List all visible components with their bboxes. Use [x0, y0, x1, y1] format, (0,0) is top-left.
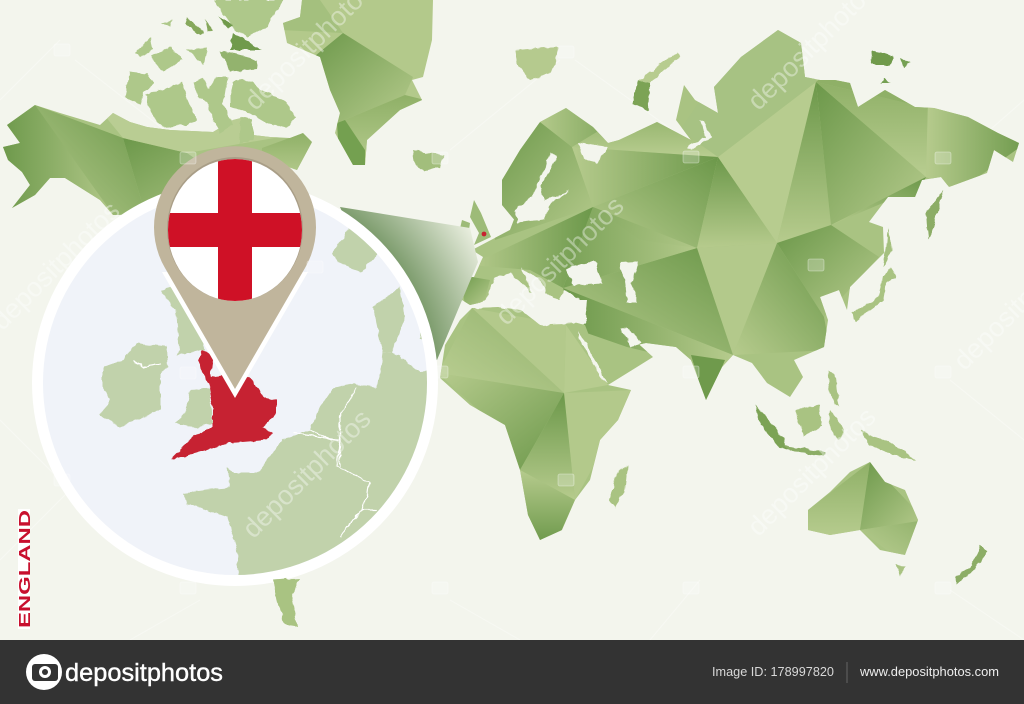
detail map: continental Europe	[99, 228, 427, 575]
vertical country label: ENGLAND	[17, 510, 34, 628]
magnifier circle	[32, 180, 445, 600]
logo wordmark: depositphotos	[65, 659, 223, 687]
map: Greenland	[283, 0, 433, 165]
vertical country label	[17, 509, 34, 629]
island below circle	[273, 578, 300, 627]
map: Iceland	[412, 150, 445, 171]
map: Arctic and Pacific islands	[515, 47, 988, 585]
seas: Mediterranean, Black Sea, Caspian, Baltic, White Sea, Red Sea, Gulf	[472, 120, 712, 383]
watermarks: depositphotos	[490, 191, 630, 331]
map: Australia	[808, 462, 918, 555]
map: Great Britain and Ireland with red marker	[458, 200, 491, 245]
website: www.depositphotos.com	[859, 664, 999, 679]
watermarks: depositphotos	[237, 404, 377, 544]
watermarks	[0, 0, 1024, 544]
watermarks: depositphotos	[742, 402, 882, 542]
flag of England	[168, 159, 302, 301]
watermark camera icons	[54, 44, 951, 594]
image id: Image ID: 178997820	[712, 664, 834, 679]
map: North America	[3, 105, 312, 215]
zoom beam from circle to England	[340, 207, 478, 360]
logo camera icon	[26, 654, 62, 690]
map: Canadian Arctic islands	[125, 0, 297, 143]
map: Africa	[440, 307, 631, 540]
England highlighted in red	[170, 350, 277, 460]
location pin with England flag	[154, 146, 316, 398]
footer bar	[0, 640, 1024, 704]
map: Eurasia	[462, 30, 1019, 400]
